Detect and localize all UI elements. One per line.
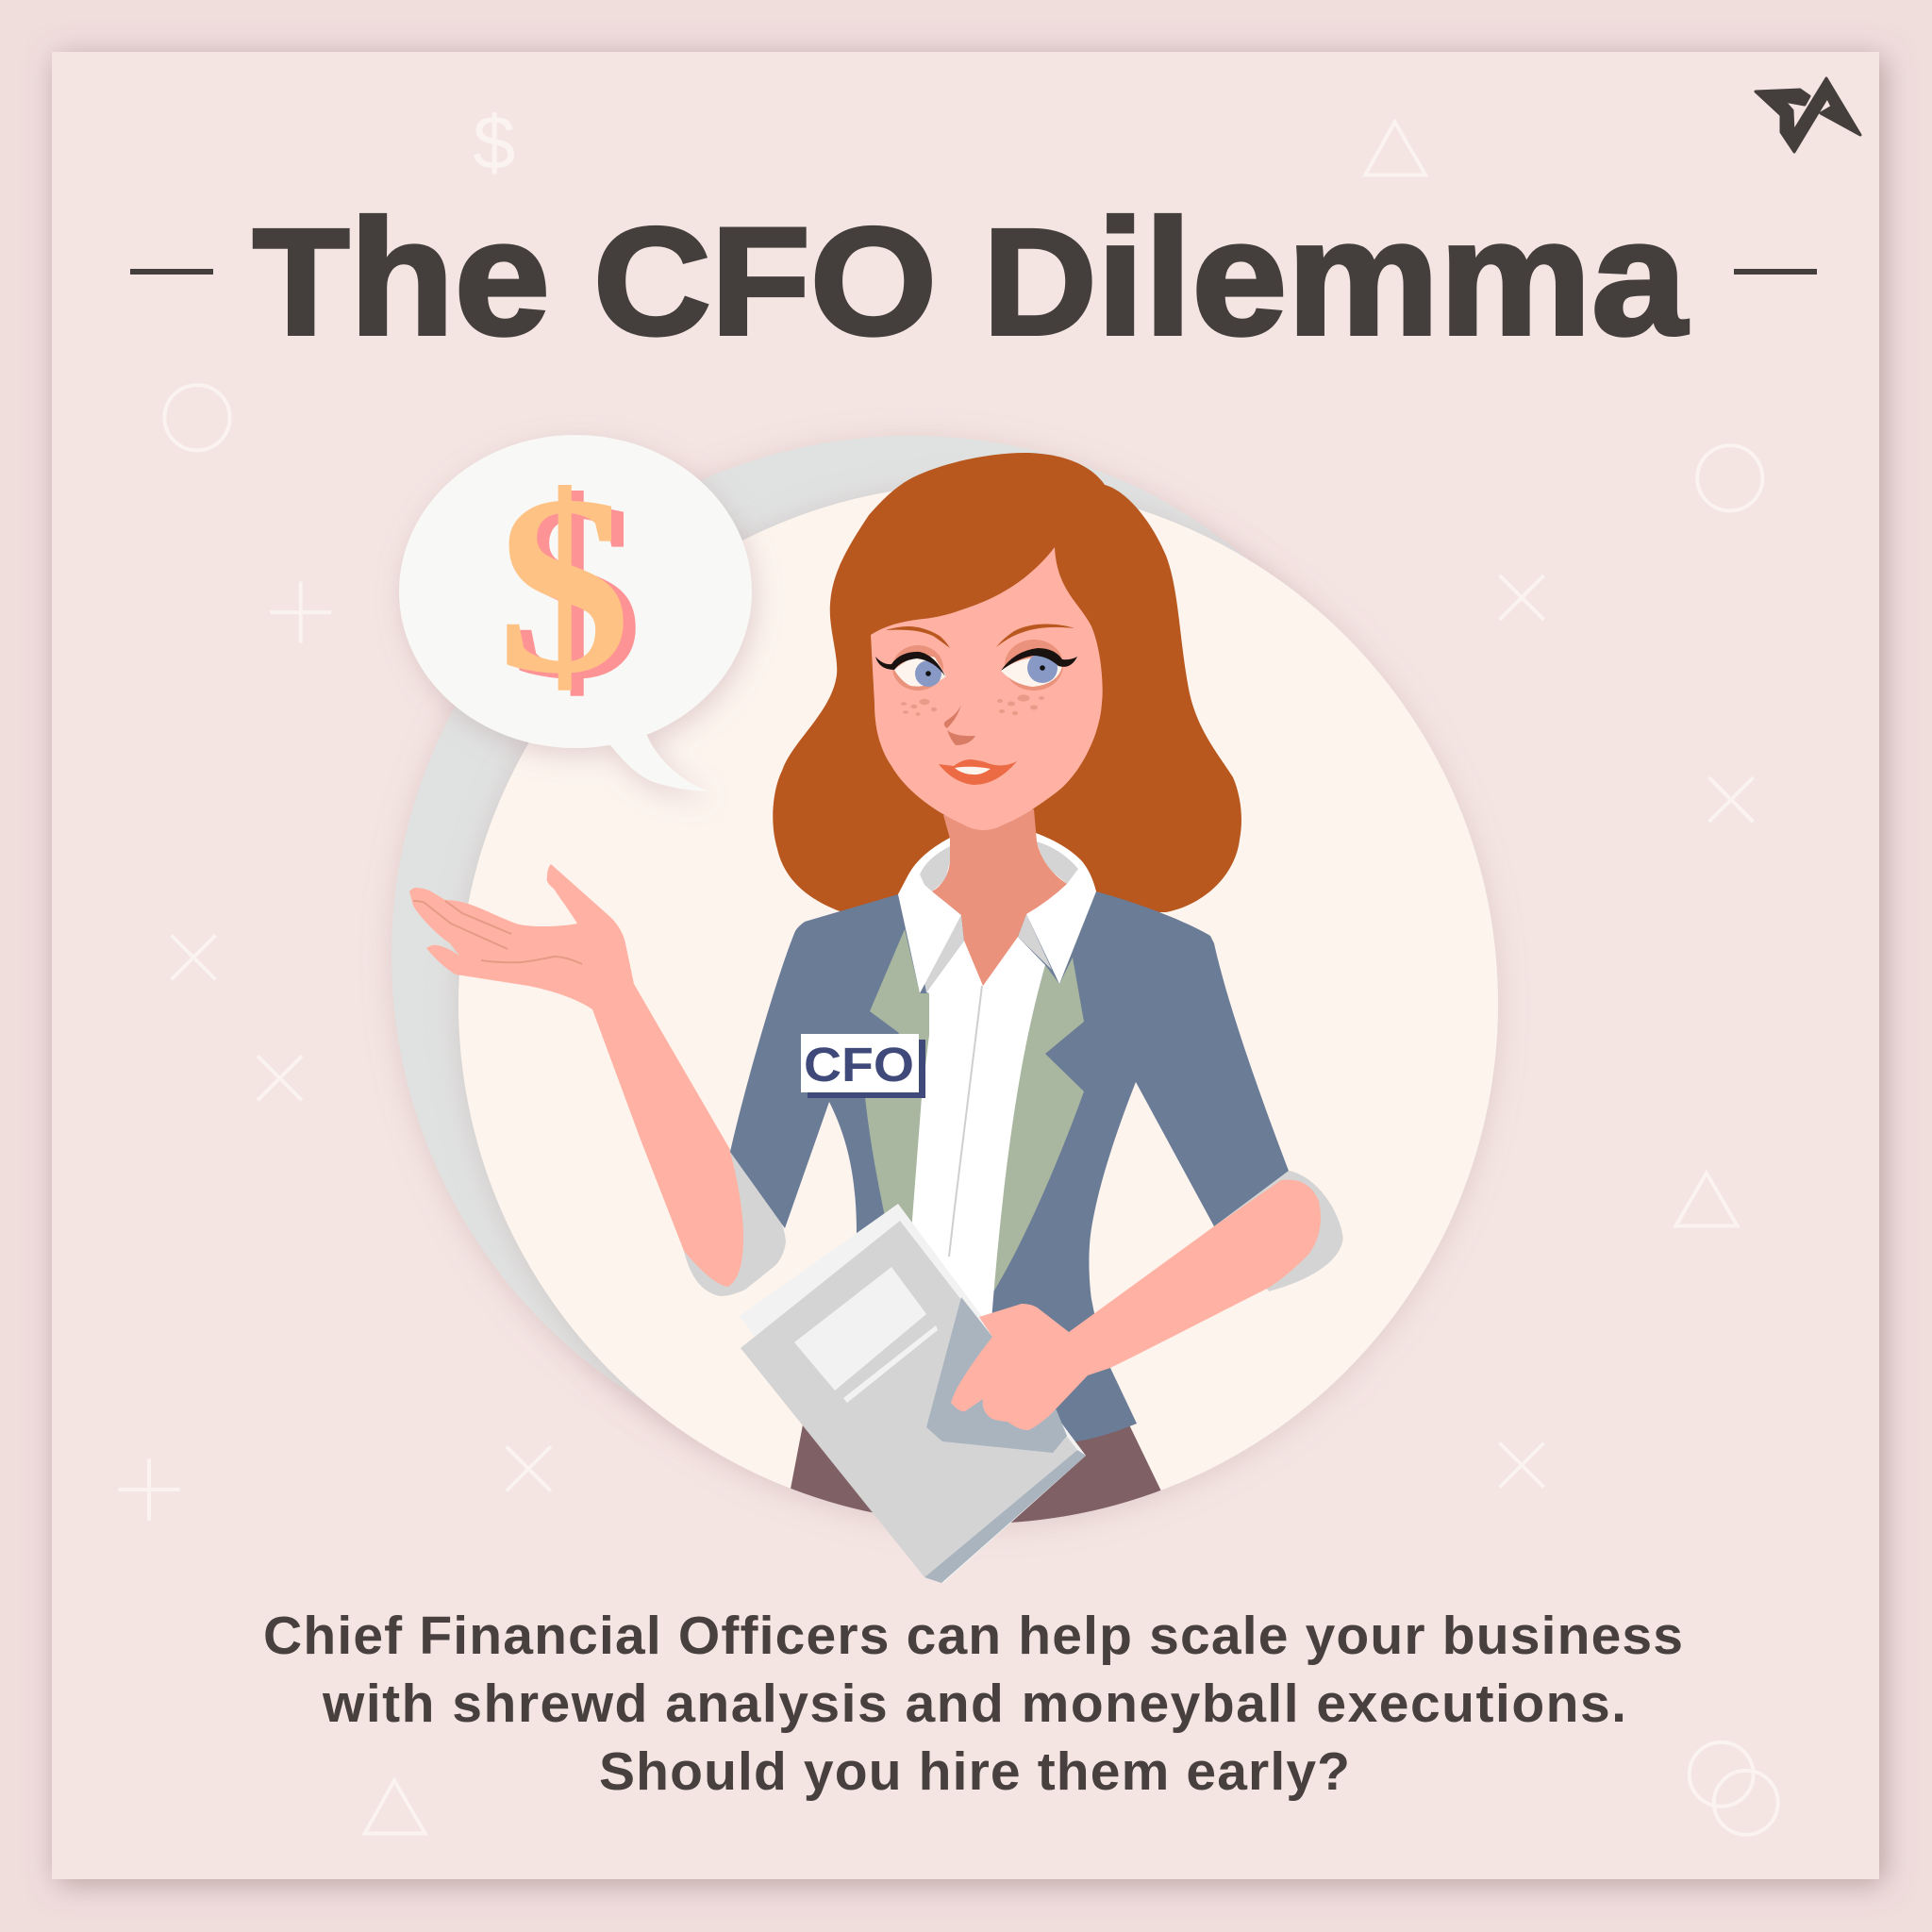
subtitle text <box>263 1606 1683 1802</box>
nose <box>944 704 975 745</box>
white shirt <box>911 937 1045 1321</box>
title <box>130 185 1817 369</box>
left arm cuff <box>684 1148 786 1296</box>
lips <box>939 759 1017 785</box>
logo <box>1756 78 1860 152</box>
speech bubble with dollar sign <box>399 435 752 791</box>
cream circle <box>458 484 1498 1524</box>
freckles <box>901 694 1044 716</box>
brows <box>886 625 1074 648</box>
subtitle text: Should you hire them early? <box>599 1741 1350 1802</box>
icon: dollar sign: $ <box>509 449 643 733</box>
right arm cuff <box>1214 1171 1343 1291</box>
left arm and raised hand <box>409 864 743 1287</box>
eye right <box>1001 640 1077 691</box>
decorative background symbols: $ <box>473 101 515 186</box>
collar <box>898 833 1096 993</box>
eye left <box>875 645 946 691</box>
right forearm and hand <box>951 1179 1321 1430</box>
skirt <box>791 1425 1160 1523</box>
subtitle text: with shrewd analysis and moneyball executions. <box>322 1674 1626 1734</box>
jacket <box>730 891 1289 1441</box>
title: Dilemma <box>983 185 1688 369</box>
decorative background symbols <box>118 101 1778 1835</box>
icon: dollar sign: $ <box>497 443 631 727</box>
character: CFO woman <box>409 453 1343 1583</box>
hair <box>773 453 1241 912</box>
grey offset ring <box>391 436 1431 1475</box>
green lapels <box>865 929 1084 1295</box>
neck <box>932 809 1067 986</box>
title: CFO <box>593 196 937 367</box>
subtitle text: Chief Financial Officers can help scale your business <box>263 1606 1683 1666</box>
CFO badge <box>801 1034 925 1098</box>
folder <box>740 1204 1086 1583</box>
face <box>871 547 1103 830</box>
title: The <box>253 185 550 369</box>
CFO badge: CFO <box>804 1038 914 1091</box>
